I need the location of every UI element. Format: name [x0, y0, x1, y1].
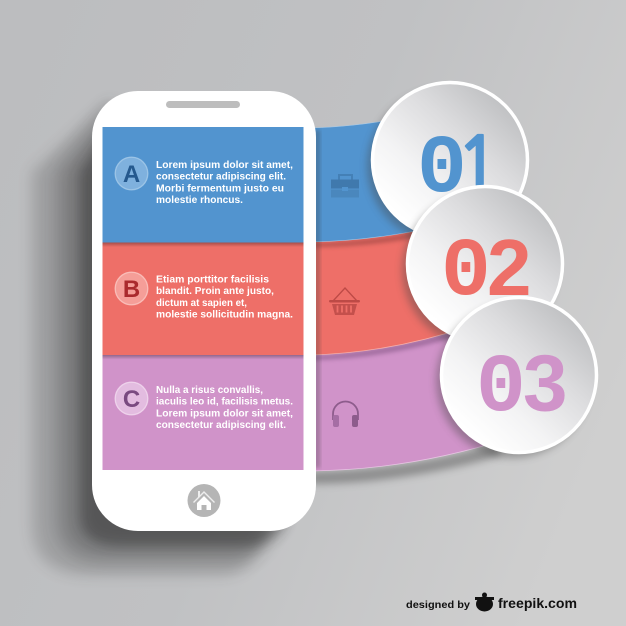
circle 03: [436, 298, 596, 458]
text A: molestie rhoncus.: [156, 195, 243, 206]
number 01: 1: [455, 129, 501, 204]
number 02: 0: [441, 225, 491, 319]
circle 02: [402, 186, 562, 347]
text C: consectetur adipiscing elit.: [156, 420, 286, 431]
icon: headphones: [333, 402, 358, 427]
curved bands: [310, 120, 510, 484]
badge C: [114, 382, 148, 416]
number 01: 0: [417, 122, 467, 216]
text B: blandit. Proin ante justo,: [156, 286, 274, 297]
text C: Lorem ipsum dolor sit amet,: [156, 408, 293, 419]
badge A: A: [123, 161, 140, 188]
text B: [156, 274, 293, 320]
icon: home button: [188, 484, 220, 517]
badge B: B: [123, 276, 140, 303]
panel: A blue: [102, 127, 304, 242]
text A: consectetur adipiscing elit.: [156, 172, 286, 183]
band 2: red: [310, 220, 470, 355]
text C: Nulla a risus convallis,: [156, 385, 263, 396]
badge A: [114, 156, 148, 190]
attribution: freepik.com: [498, 595, 577, 611]
attribution: [406, 592, 577, 612]
shadow of red band on purple: [310, 326, 470, 360]
text B: Etiam porttitor facilisis: [156, 274, 270, 286]
phone body: [92, 91, 316, 531]
attribution: designed by: [406, 599, 470, 611]
text B: dictum at sapien et,: [156, 298, 247, 309]
text A: [156, 160, 293, 206]
circle 01: [367, 82, 528, 243]
shadow of blue band on red: [310, 230, 425, 247]
phone shadow: [32, 100, 300, 575]
phone: [92, 91, 316, 531]
number 02: 2: [487, 223, 532, 312]
badge C: C: [123, 386, 140, 413]
icon: freepik logo: [475, 592, 494, 612]
panel: B red: [102, 242, 304, 355]
soft shadow under purple band: [310, 442, 500, 484]
band 3: purple: [310, 320, 510, 471]
text C: iaculis leo id, facilisis metus.: [156, 397, 293, 408]
text A: Morbi fermentum justo eu: [156, 183, 284, 194]
number 03: 3: [523, 338, 568, 428]
phone edge shadow on bands: [314, 130, 320, 468]
text A: Lorem ipsum dolor sit amet,: [156, 160, 293, 171]
number 03: 0: [476, 341, 526, 435]
speaker: [166, 101, 240, 108]
panel: C purple: [102, 355, 304, 470]
text C: [156, 385, 293, 431]
badge B: [114, 272, 148, 306]
band 1: blue: [310, 120, 430, 242]
icon: basket: [329, 288, 360, 315]
icon: briefcase: [331, 174, 359, 198]
text B: molestie sollicitudin magna.: [156, 310, 293, 320]
